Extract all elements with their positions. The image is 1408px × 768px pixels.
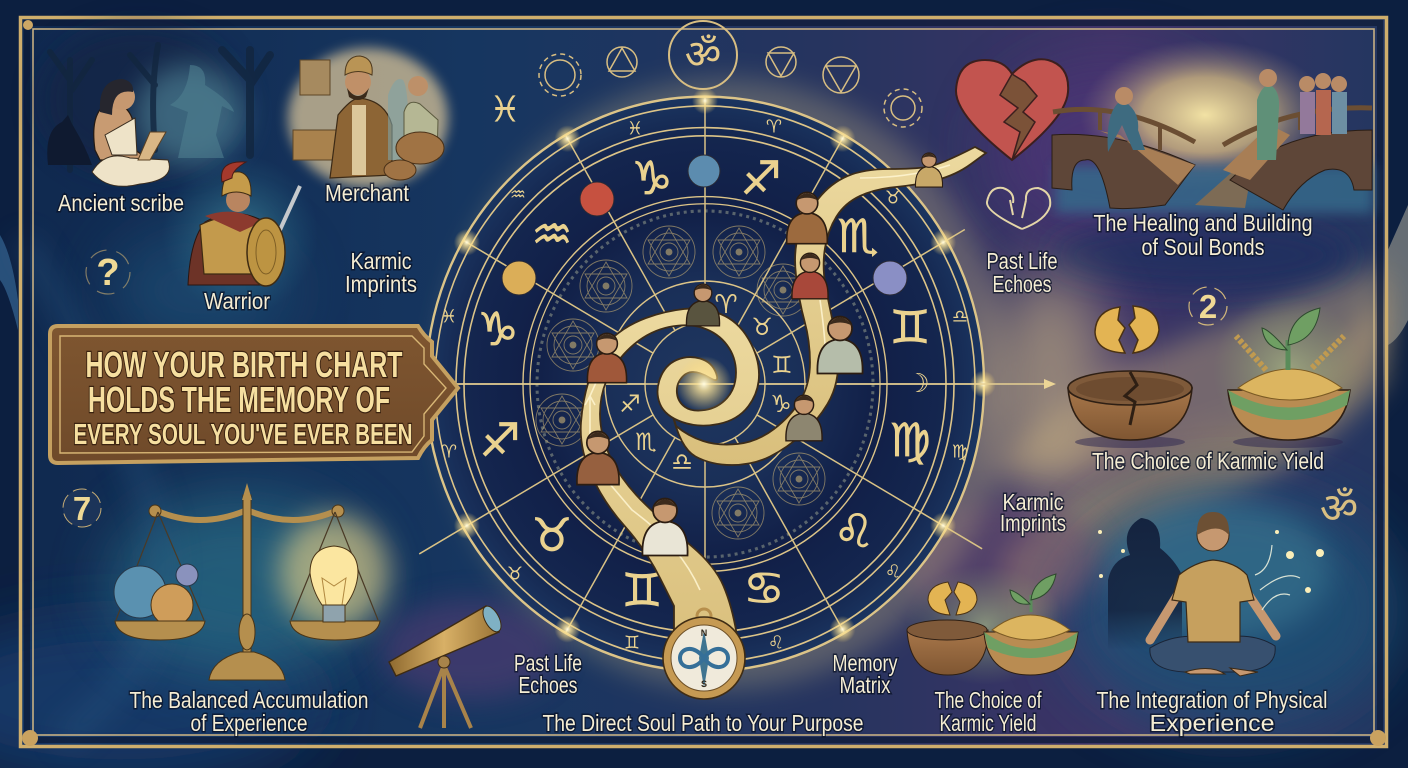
zodiac glyphs: ♈︎: [766, 116, 782, 138]
chakra row and om: [539, 21, 922, 127]
zodiac glyphs: ♉︎: [507, 564, 523, 584]
zodiac glyphs: ♐︎: [479, 413, 521, 467]
badge: number 7: 7: [73, 490, 91, 527]
zodiac glyphs: ♓︎: [627, 118, 643, 140]
badge: number 2: 2: [1199, 288, 1217, 325]
zodiac glyphs: ♌︎: [768, 632, 784, 654]
compass: [663, 609, 745, 699]
labels: Imprints: [1000, 510, 1066, 536]
labels: Karmic Yield: [940, 710, 1036, 736]
zodiac glyphs: ♓︎: [441, 306, 457, 328]
labels: of Soul Bonds: [1142, 234, 1264, 260]
labels: Karmic: [350, 248, 412, 274]
zodiac glyphs: ♊︎: [771, 351, 793, 379]
labels: The Healing and Building: [1094, 210, 1312, 236]
title text: EVERY SOUL YOU'VE EVER BEEN: [74, 419, 412, 451]
path sparkles and direction arrows: [585, 165, 950, 590]
labels: [58, 180, 1328, 736]
labels: Merchant: [325, 180, 410, 206]
long horizontal axis with arrow: [440, 379, 1056, 389]
labels: Echoes: [992, 271, 1052, 297]
zodiac glyphs: ♍︎: [889, 413, 931, 467]
soul path: first arm spiral: [581, 309, 759, 660]
scene: broken bridge and soul bonds: [1052, 40, 1373, 213]
plaque with title: [50, 326, 458, 463]
zodiac glyphs: ♐︎: [740, 151, 782, 205]
soul path: second arm: [672, 147, 986, 465]
icon: question mark badge: ?: [96, 252, 120, 294]
zodiac glyphs: ♏︎: [837, 209, 879, 263]
small coin, bowl and grain set: [905, 565, 1078, 685]
icon: pisces symbol: ♓︎: [489, 90, 521, 130]
labels: Warrior: [204, 288, 270, 314]
labels: of Experience: [190, 710, 308, 736]
labels: Memory: [832, 650, 898, 676]
scales with planets and light bulb: [114, 483, 389, 680]
badge: number 2: [1189, 287, 1227, 325]
zodiac glyphs: ♋︎: [743, 561, 785, 615]
planets: [502, 155, 907, 295]
labels: Echoes: [518, 672, 578, 698]
zodiac glyphs: ♌︎: [885, 562, 901, 582]
labels: Karmic: [1002, 489, 1064, 515]
labels: Imprints: [345, 271, 417, 297]
central birth chart wheel: [419, 87, 996, 671]
title text: HOW YOUR BIRTH CHART: [86, 344, 403, 385]
telescope: [389, 603, 505, 728]
central glowing star: [676, 356, 732, 412]
labels: The Direct Soul Path to Your Purpose: [542, 710, 864, 736]
compass: S: [701, 679, 707, 689]
past-life figures on the path: [577, 153, 943, 556]
broken wooden bowl: [1068, 371, 1192, 448]
title text: [74, 344, 412, 451]
zodiac glyphs: ♒︎: [531, 207, 573, 261]
grain bowl with sprout: [1213, 295, 1363, 448]
icon: broken heart: [956, 59, 1068, 160]
labels: Past Life: [514, 650, 582, 676]
icon: question mark badge: [86, 250, 130, 294]
zodiac glyphs: ♈︎: [714, 290, 738, 320]
zodiac glyphs: ♎︎: [671, 448, 693, 476]
zodiac glyphs: ♑︎: [477, 302, 519, 356]
scene: ancient scribe in haunted forest: [40, 25, 270, 186]
zodiac glyphs: ♎︎: [952, 306, 968, 328]
zodiac glyphs: ♉︎: [885, 188, 901, 208]
compass: N: [701, 628, 707, 638]
labels: Experience: [1150, 710, 1274, 736]
zodiac glyphs: ♑︎: [631, 151, 673, 205]
zodiac glyphs: ♊︎: [624, 632, 640, 654]
zodiac glyphs: ♊︎: [889, 300, 931, 354]
broken coin: [1095, 306, 1159, 353]
zodiac glyphs: [441, 116, 968, 654]
meditating figure with shadow self: [1098, 500, 1330, 676]
labels: Ancient scribe: [58, 190, 184, 216]
labels: The Choice of Karmic Yield: [1092, 448, 1324, 474]
labels: The Balanced Accumulation: [130, 687, 368, 713]
zodiac glyphs: ♌︎: [833, 504, 875, 558]
zodiac glyphs: ♍︎: [952, 442, 968, 462]
badge: number 7: [63, 489, 101, 527]
scene: warrior: [162, 155, 318, 315]
zodiac glyphs: ♒︎: [510, 184, 526, 206]
labels: Matrix: [840, 672, 891, 698]
title text: HOLDS THE MEMORY OF: [88, 379, 390, 420]
labels: The Choice of: [934, 687, 1042, 713]
zodiac glyphs: ♏︎: [635, 428, 657, 456]
labels: Past Life: [986, 248, 1058, 274]
zodiac glyphs: ♊︎: [621, 563, 663, 617]
icon: broken heart outline: [987, 188, 1050, 229]
scene: merchant at market stall: [288, 48, 448, 188]
om symbol: ॐ: [1320, 484, 1358, 532]
zodiac glyphs: ♑︎: [770, 390, 792, 418]
chakra row and om: ॐ: [685, 32, 721, 78]
zodiac glyphs: ♐︎: [619, 390, 641, 418]
zodiac glyphs: ♈︎: [441, 442, 457, 462]
zodiac glyphs: ☽︎: [906, 369, 930, 399]
zodiac glyphs: ♉︎: [751, 313, 773, 341]
mandala rings: [536, 226, 825, 539]
labels: The Integration of Physical: [1096, 687, 1328, 713]
zodiac glyphs: ♉︎: [531, 508, 573, 562]
